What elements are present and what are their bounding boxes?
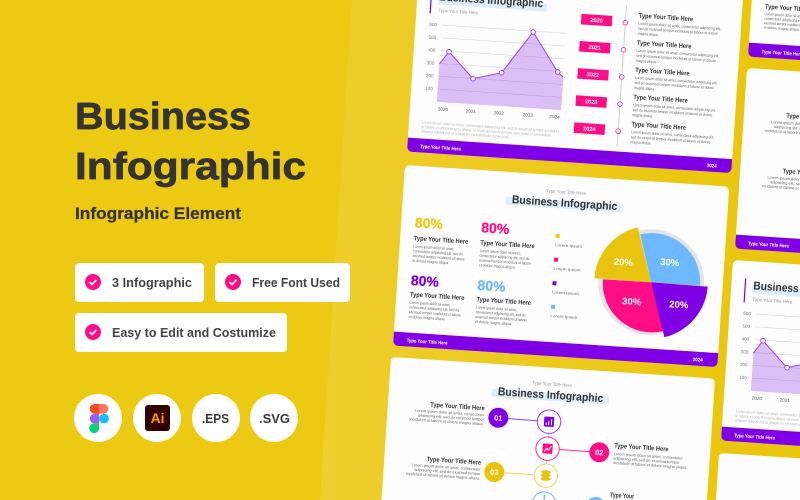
line chart (424, 22, 566, 120)
stat: pink 80%: 80% (481, 219, 510, 237)
panel: right middle slide (735, 68, 800, 270)
stat: purple 80%: et dolore magna aliqua. (408, 314, 446, 321)
timeline text 2024 (630, 121, 715, 150)
pie chart: 30% (622, 296, 642, 308)
timeline text 2022 (634, 67, 718, 95)
stat: pink 80%: Type Your Title Here (480, 240, 535, 250)
line chart: 2023 (522, 112, 533, 118)
timeline text 2020: sed do eiusmod tempor incididunt ut labore et dolore (638, 26, 718, 36)
slide heading: Business Infographic (512, 194, 618, 213)
icon: Adobe Illustrator (133, 394, 181, 442)
stat: purple 80% (408, 272, 466, 322)
slide footer: 2024 (693, 357, 703, 364)
year badges: 2020 (590, 18, 603, 25)
slide heading: Type Your Title Here (752, 297, 793, 306)
timeline text 2023: Lorem ipsum dolor sit amet, consectetur adipiscing elit, (633, 102, 716, 113)
feature pill: Free Font Used: Free Font Used (252, 275, 340, 290)
title: Infographic (75, 146, 306, 188)
text block lower (762, 167, 800, 193)
timeline text 2022: magna aliqua. (634, 85, 655, 91)
line chart: 600 (743, 311, 752, 316)
year badges: 2024 (583, 126, 597, 133)
stat: purple 80%: eiusmod tempor incididunt ut labore (409, 309, 461, 318)
line chart: 400 (427, 47, 436, 53)
timeline text 2021: magna aliqua. (636, 58, 657, 64)
pie chart: 30% (660, 257, 680, 269)
panel: bottom right slide (716, 453, 800, 500)
timeline text 2024: Lorem ipsum dolor sit amet, consectetur adipiscing elit, (631, 129, 714, 140)
icon: EPS (192, 394, 240, 442)
line chart: 400 (741, 336, 750, 342)
icon: blue node (533, 492, 555, 500)
timeline (615, 6, 629, 147)
text block 03 (406, 455, 482, 481)
step 02 badge (589, 442, 610, 463)
feature pill: 3 Infographic: 3 Infographic (112, 275, 192, 290)
year badges: 2023 (585, 99, 598, 106)
line chart: 300 (427, 60, 435, 66)
stat: yellow 80% (412, 214, 470, 266)
chart description: ullamco laboris nisi ut aliquip ex ea commodo consequat. (421, 128, 509, 139)
slide heading: Type Your Title Here (532, 380, 572, 389)
stat: yellow 80%: Type Your Title Here (414, 235, 469, 246)
icon: Adobe Illustrator: Ai (150, 410, 164, 426)
line chart: 2020 (438, 107, 449, 112)
stat: pink 80%: eiusmod tempor incididunt ut labore (479, 257, 531, 266)
slide heading (506, 186, 624, 214)
panel: top right slide (748, 0, 800, 78)
line chart: 2024 (549, 114, 560, 120)
title (75, 96, 306, 188)
feature pill: Free Font Used (215, 263, 350, 302)
step 03 badge (484, 461, 505, 483)
slide footer: Type Your Title Here (420, 144, 461, 153)
chart description (421, 120, 560, 143)
line chart: 200 (426, 73, 434, 79)
slide footer (748, 43, 800, 78)
slide footer: Type Your Title Here (734, 433, 775, 442)
line chart: 200 (740, 362, 748, 368)
stat: blue 80%: 80% (477, 277, 507, 295)
text block 03: Lorem ipsum dolor sit amet, consectetur (411, 462, 482, 472)
icon: SVG (250, 394, 298, 442)
icon: bar chart node (537, 409, 562, 434)
stat: blue 80%: consectetur adipiscing elit, sed do (476, 309, 526, 318)
chart description: Lorem ipsum dolor sit amet, consectetur adipiscing elit, sed do eiusmod tempor incididunt (422, 120, 560, 134)
line chart: 300 (741, 349, 749, 355)
icon: Figma (74, 394, 122, 442)
step 02 badge: 02 (595, 448, 604, 457)
pie legend (550, 234, 583, 320)
timeline text 2022: Lorem ipsum dolor sit amet, consectetur adipiscing elit, (635, 75, 718, 85)
stat: blue 80%: et dolore magna aliqua. (475, 319, 512, 326)
text block 03: adipiscing elit, sed do eiusmod tempor (414, 467, 481, 476)
slide heading: Type Your Title Here (438, 8, 479, 17)
pie legend: Lorem Ipsum (550, 313, 577, 320)
line chart: 500 (742, 324, 751, 329)
text block 01: incididunt ut labore et dolore magna aliqua. (409, 416, 484, 426)
stat: pink 80% (479, 219, 537, 271)
line chart: 600 (429, 22, 438, 27)
line chart: 100 (739, 375, 747, 380)
pie chart (587, 220, 715, 345)
stat: blue 80%: eiusmod tempor incididunt ut labore (475, 314, 527, 322)
text block 01: Type Your Title Here (430, 402, 485, 412)
title: Business (75, 96, 251, 138)
panel: percentage and pie chart slide (393, 165, 729, 367)
timeline text 2022: sed do eiusmod tempor incididunt ut labore et dolore (634, 80, 714, 90)
line chart: 2021 (780, 397, 791, 403)
step 03 badge: 03 (490, 468, 499, 477)
chart description (735, 409, 800, 432)
stat: blue 80% (475, 277, 533, 327)
icon: EPS: .EPS (202, 411, 229, 426)
panel: line chart and timeline slide (407, 0, 743, 173)
slide heading: Business Infographic (498, 386, 604, 405)
text block 01 (409, 400, 486, 426)
text block 03: incididunt ut labore et dolore magna aliqua. (406, 471, 480, 481)
step 04 badge (588, 497, 603, 500)
timeline text 2024: Type Your Title Here (631, 121, 686, 132)
timeline text 2020: Lorem ipsum dolor sit amet, consectetur adipiscing elit, (638, 21, 721, 31)
slide heading (492, 378, 610, 406)
icon: SVG: .SVG (259, 411, 290, 426)
stat: yellow 80%: consectetur adipiscing elit, sed do (413, 248, 463, 257)
stat: yellow 80%: eiusmod tempor incididunt ut labore (413, 253, 465, 261)
text block 01: adipiscing elit, sed do eiusmod tempor (418, 412, 485, 422)
year badges: 2022 (587, 72, 599, 79)
stat: purple 80%: 80% (410, 272, 440, 290)
stat: purple 80%: consectetur adipiscing elit, sed do (409, 304, 459, 313)
icon: database node (533, 463, 558, 488)
slide footer (721, 427, 800, 462)
text block (764, 4, 800, 33)
connectors (504, 419, 592, 478)
timeline text 2020: magna aliqua. (637, 31, 659, 37)
pie chart: 20% (613, 257, 634, 269)
feature pill: 3 Infographic (75, 263, 204, 302)
stat: blue 80%: Lorem ipsum dolor sit amet, (476, 305, 517, 312)
timeline text 2024: magna aliqua. (630, 139, 652, 146)
subtitle: Infographic Element (75, 204, 241, 223)
slide heading (430, 0, 548, 21)
timeline text 2021: Type Your Title Here (637, 40, 692, 50)
step 01 badge (488, 407, 509, 428)
timeline text 2023 (632, 94, 716, 123)
slide footer: Type Your Title Here (406, 338, 448, 347)
slide heading: Type Your Title Here (546, 188, 586, 197)
chart description: ut labore et dolore magna aliqua. Ut enim ad minim veniam, quis nostrud exercitation (421, 124, 551, 138)
timeline text 2022: Type Your Title Here (635, 67, 690, 78)
slide footer: Type Your Title Here (748, 241, 789, 250)
timeline text 2021: sed do eiusmod tempor incididunt ut labore et dolore (636, 53, 716, 63)
stat: pink 80%: consectetur adipiscing elit, sed do (479, 253, 530, 261)
text block 03: Type Your Title Here (426, 456, 482, 467)
line chart: 2022 (493, 110, 504, 116)
line chart: 100 (425, 86, 433, 91)
text block 02: Type Your Title Here (614, 443, 669, 453)
stat: yellow 80%: et dolore magna aliqua. (412, 258, 449, 265)
slide footer (735, 235, 800, 270)
slide footer (393, 332, 718, 367)
text block 02: incididunt ut labore et dolore magna aliqua. (613, 460, 688, 470)
timeline text 2020 (637, 13, 722, 41)
panel: right line chart slide (721, 260, 800, 462)
text block 01: Lorem ipsum dolor sit amet, consectetur (415, 408, 485, 417)
timeline text 2023: Type Your Title Here (633, 94, 688, 105)
stat: yellow 80%: Lorem ipsum dolor sit amet, (413, 244, 454, 251)
text block 02: adipiscing elit, sed do eiusmod tempor (613, 455, 680, 465)
line chart: 2020 (752, 396, 763, 401)
slide heading (744, 278, 800, 310)
slide footer (407, 138, 732, 173)
timeline text 2020: Type Your Title Here (639, 13, 694, 23)
year badges: 2021 (588, 45, 601, 52)
feature pill: Easy to Edit and Costumize: Easy to Edit and Costumize (112, 325, 276, 340)
pie chart: 20% (669, 299, 689, 312)
stat: purple 80%: Lorem ipsum dolor sit amet, (409, 300, 451, 307)
feature pill: Easy to Edit and Costumize (75, 313, 287, 352)
text block upper (765, 111, 800, 138)
line chart: 2021 (466, 108, 477, 114)
timeline text 2023: magna aliqua. (632, 112, 653, 118)
timeline text 2024: sed do eiusmod tempor incididunt ut labore et dolore (631, 134, 711, 144)
text block 02: Lorem ipsum dolor sit amet, consectetur (614, 451, 684, 461)
pie legend: Lorem Ipsum (552, 289, 579, 296)
timeline text 2021: Lorem ipsum dolor sit amet, consectetur adipiscing elit, (636, 48, 720, 58)
text block 02 (613, 443, 689, 470)
pie legend: Lorem Ipsum (555, 242, 582, 249)
stat: blue 80%: Type Your Title Here (476, 296, 531, 307)
year badges (574, 14, 612, 135)
line chart (738, 311, 800, 409)
stat: purple 80%: Type Your Title Here (410, 291, 465, 302)
timeline text 2023: sed do eiusmod tempor incididunt ut labore et dolore (632, 107, 713, 117)
slide footer: 2024 (707, 163, 717, 170)
pie legend: Lorem Ipsum (553, 266, 581, 273)
stat: pink 80%: Lorem ipsum dolor sit amet, (480, 248, 521, 256)
line chart: 500 (428, 35, 437, 40)
step 01 badge: 01 (494, 413, 503, 423)
timeline text 2021 (636, 40, 720, 68)
icon: trend node (535, 436, 560, 461)
stat: yellow 80%: 80% (414, 214, 444, 232)
panel: process flow slide (382, 357, 715, 500)
stat: pink 80%: et dolore magna aliqua. (479, 262, 516, 270)
